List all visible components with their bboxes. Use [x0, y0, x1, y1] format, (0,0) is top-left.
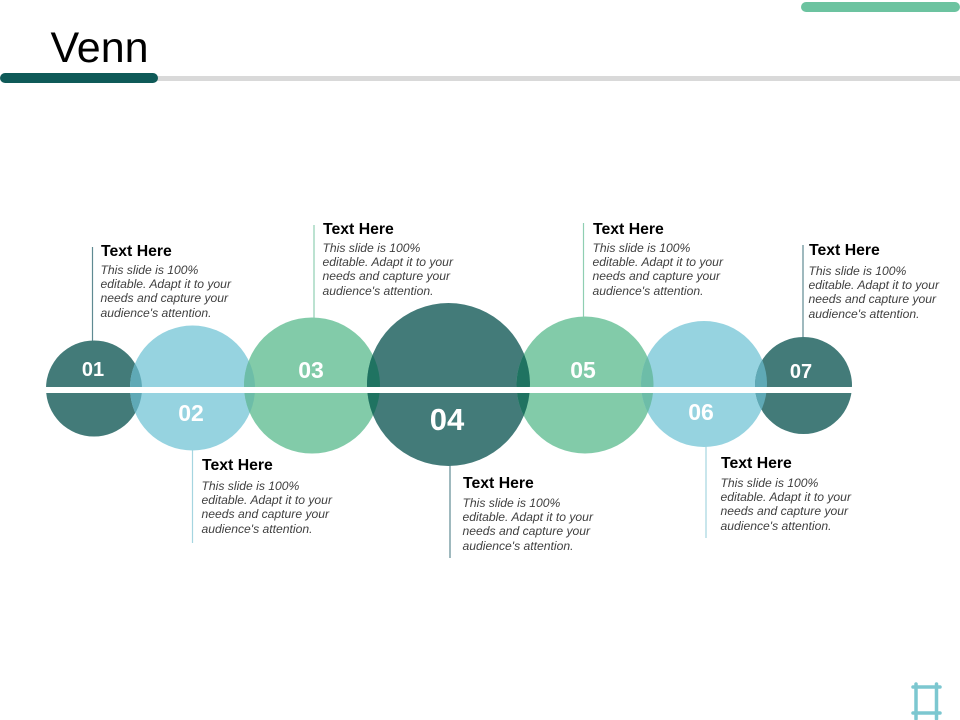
connector lines: [92, 223, 803, 558]
text block 01: audience's attention.: [100, 306, 212, 320]
text block 05: Text Here: [593, 221, 664, 238]
text block 07: This slide is 100%: [808, 264, 907, 278]
text block 06: needs and capture your: [720, 504, 849, 518]
number 07: 07: [790, 361, 812, 383]
text block 01: Text Here: [101, 243, 172, 260]
text block 01: editable. Adapt it to your: [100, 277, 232, 291]
number 01: 01: [82, 359, 104, 381]
text block 02: [202, 457, 333, 536]
top-right accent bar: [801, 2, 960, 12]
number 03: 03: [298, 357, 324, 383]
number 02: 02: [178, 400, 204, 426]
text block 01: needs and capture your: [100, 291, 229, 305]
text block 05: editable. Adapt it to your: [592, 255, 724, 269]
circle 05: [516, 316, 654, 454]
text block 06: [720, 455, 852, 533]
overlap 03-04: [367, 354, 380, 415]
text block 02: editable. Adapt it to your: [202, 493, 333, 507]
circle 07: [755, 337, 852, 434]
white horizontal band: [40, 387, 858, 393]
text block 04: Text Here: [463, 475, 534, 492]
text block 02: Text Here: [202, 457, 273, 474]
overlap 05-06: [641, 356, 654, 412]
text block 07: Text Here: [809, 242, 880, 259]
text block 02: This slide is 100%: [202, 479, 300, 493]
text block 02: audience's attention.: [202, 522, 312, 536]
text block 07: [808, 242, 940, 321]
venn circle chain: [46, 303, 852, 466]
text block 04: editable. Adapt it to your: [462, 510, 594, 524]
circle 02: [130, 326, 255, 450]
text block 01: This slide is 100%: [100, 263, 199, 277]
text block 04: audience's attention.: [462, 539, 574, 553]
text block 04: This slide is 100%: [462, 496, 561, 510]
circle 01: [46, 340, 142, 436]
text block 03: audience's attention.: [322, 284, 434, 298]
text block 06: editable. Adapt it to your: [720, 490, 852, 504]
text block 06: Text Here: [721, 455, 792, 472]
title underline accent: [0, 73, 158, 83]
circle 06: [641, 321, 767, 447]
number 04: 04: [430, 402, 465, 437]
text block 06: This slide is 100%: [720, 476, 819, 490]
text block 06: audience's attention.: [720, 519, 832, 533]
text block 03: editable. Adapt it to your: [322, 255, 454, 269]
text block 01: [100, 243, 232, 320]
overlap 06-07: [755, 360, 767, 410]
text block 05: This slide is 100%: [592, 241, 691, 255]
circle 04: [367, 303, 530, 466]
text block 02: needs and capture your: [202, 507, 330, 521]
title: Venn: [50, 24, 149, 72]
number 05: 05: [570, 357, 596, 383]
text block 05: needs and capture your: [592, 269, 721, 283]
icon: square frame corner mark: [913, 684, 940, 719]
text block 07: audience's attention.: [808, 307, 920, 321]
text block 03: This slide is 100%: [322, 241, 421, 255]
text block 05: audience's attention.: [592, 284, 704, 298]
overlap 01-02: [130, 364, 142, 413]
text block 04: needs and capture your: [462, 524, 591, 538]
text block 05: [592, 221, 724, 298]
text block 03: [322, 221, 454, 298]
overlap 04-05: [516, 354, 530, 416]
text block 07: editable. Adapt it to your: [808, 278, 940, 292]
text block 07: needs and capture your: [808, 292, 937, 306]
circle 03: [244, 318, 380, 454]
text block 03: Text Here: [323, 221, 394, 238]
text block 04: [462, 475, 594, 553]
text block 03: needs and capture your: [322, 269, 451, 283]
overlap 02-03: [244, 360, 255, 413]
title underline track: [150, 76, 960, 81]
number 06: 06: [688, 399, 714, 425]
